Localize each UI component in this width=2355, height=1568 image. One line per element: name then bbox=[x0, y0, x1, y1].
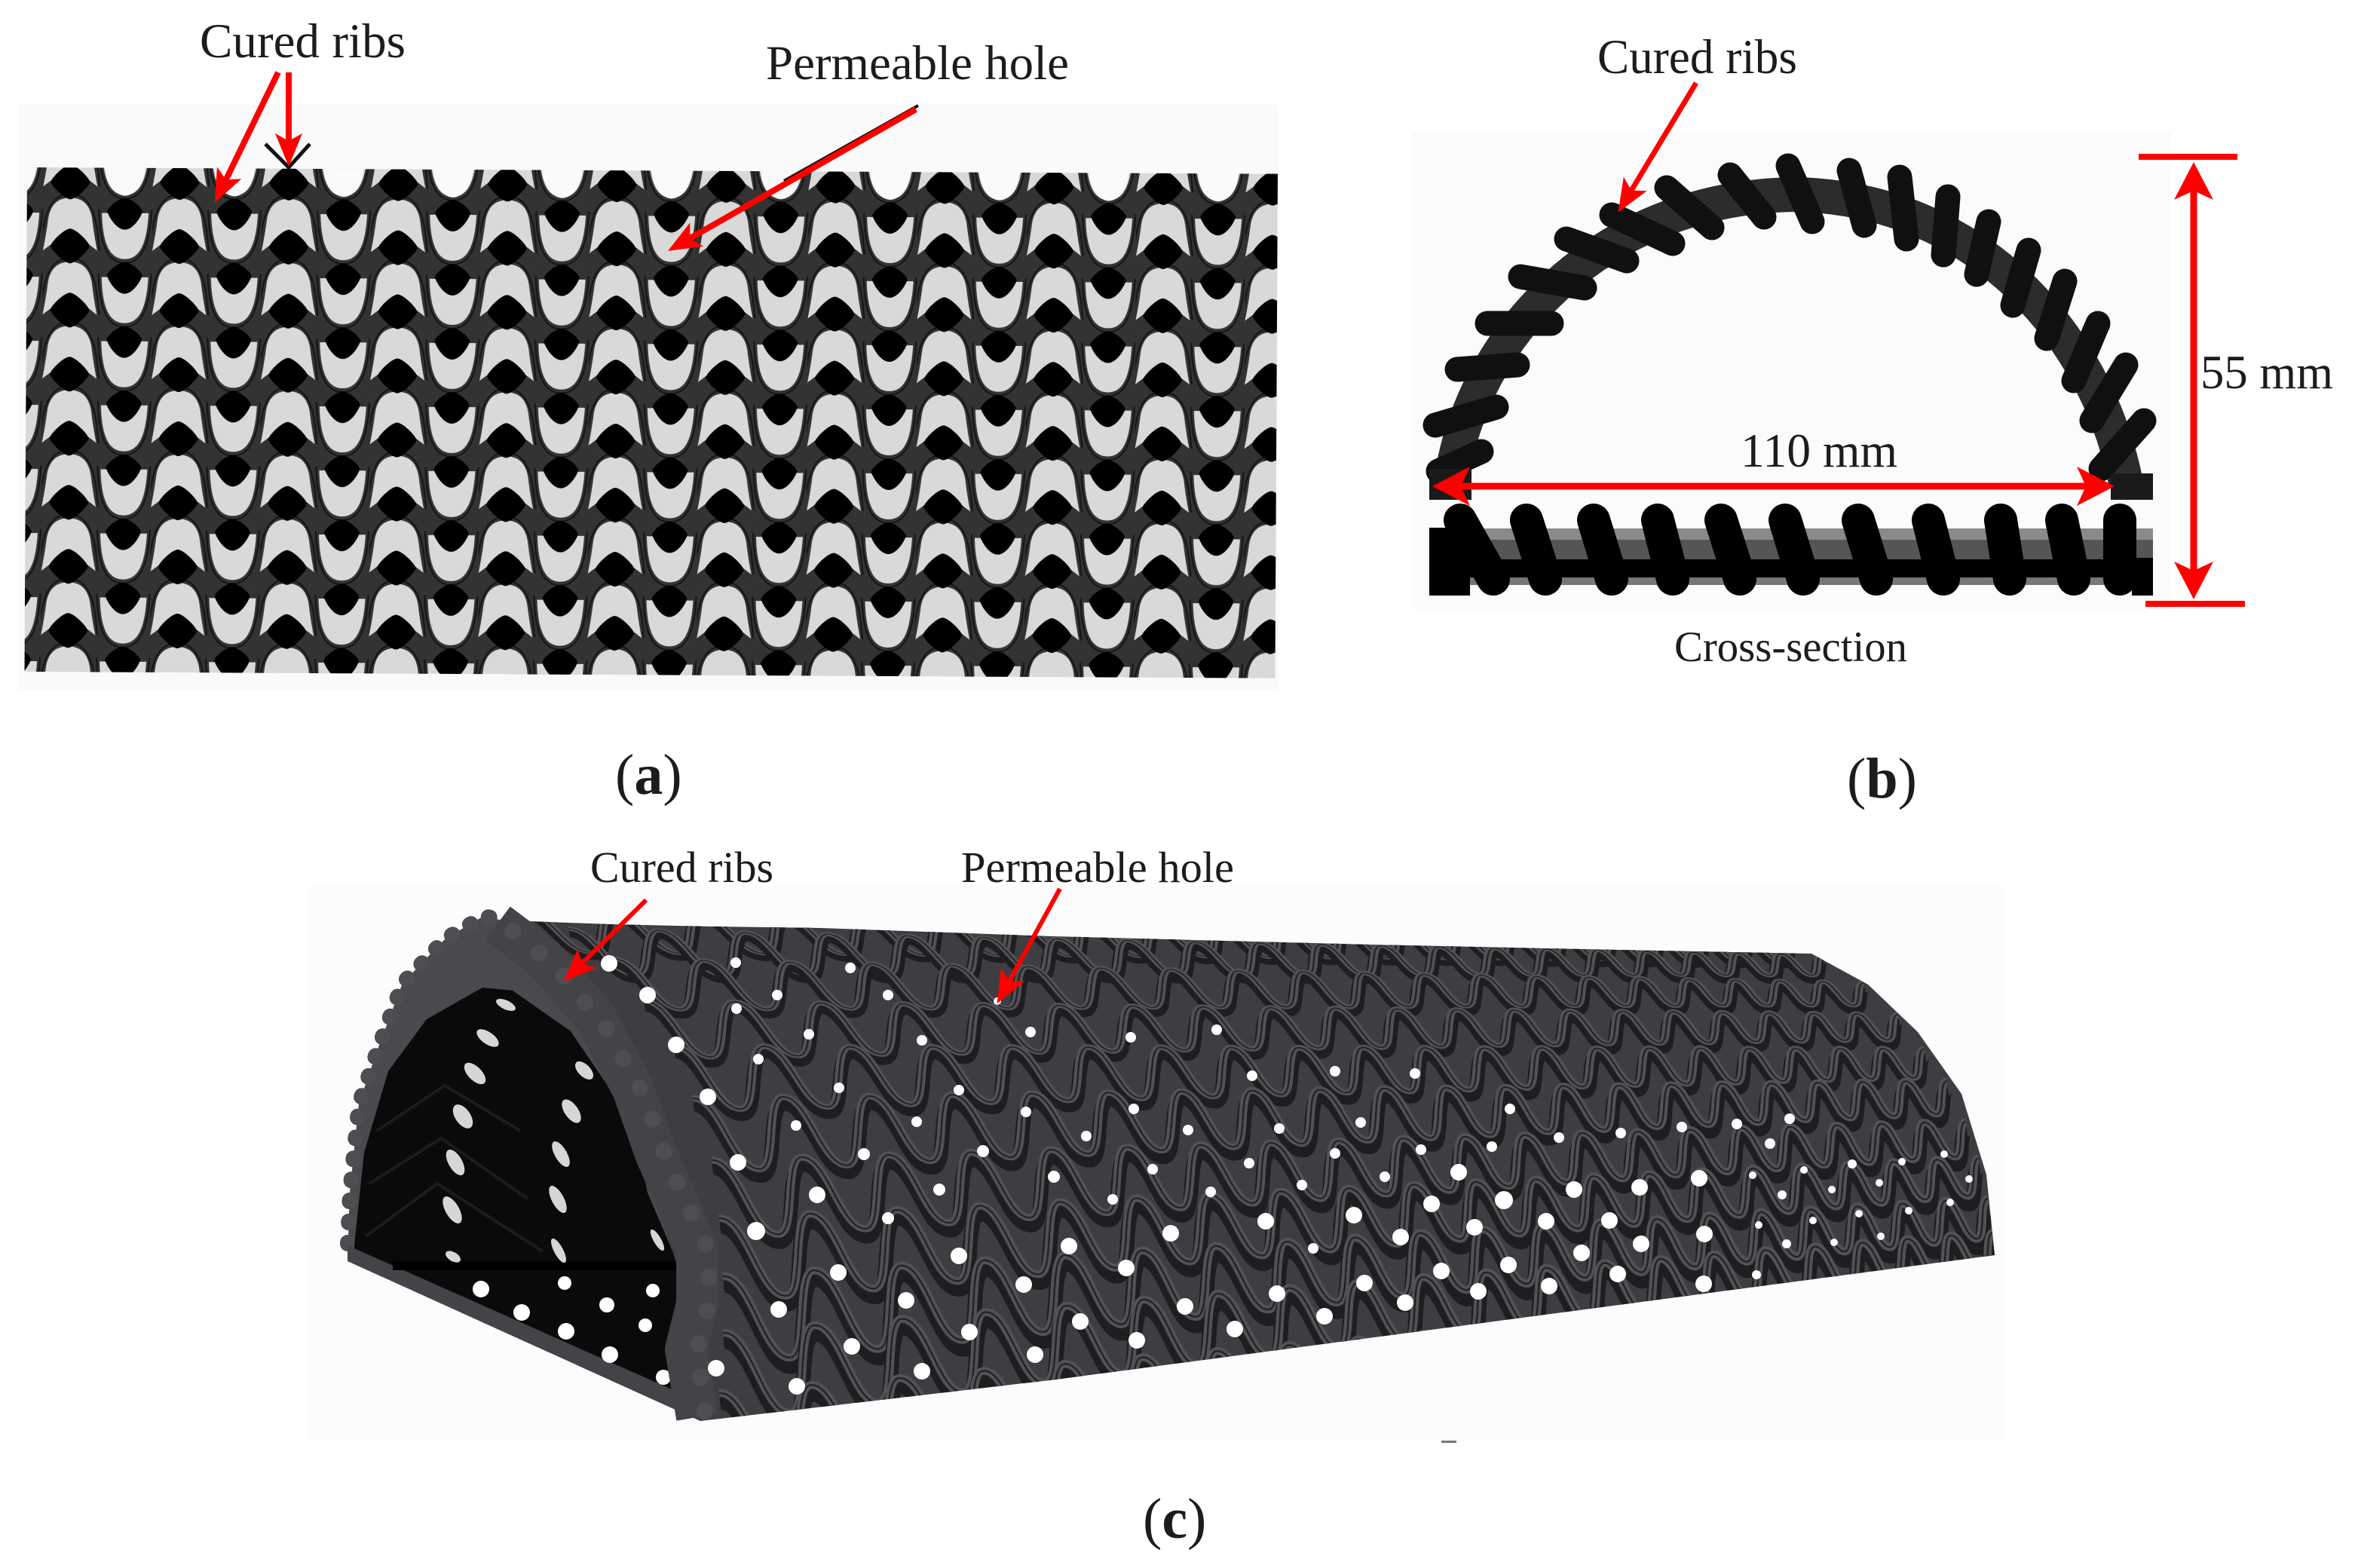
mesh sheet with cured ribs and permeable holes bbox=[24, 167, 1278, 678]
arrow: cured ribs right bbox=[286, 72, 292, 144]
inner chevrons bbox=[366, 1086, 543, 1251]
small grey mark bbox=[1441, 1441, 1456, 1443]
label: cross-section: Cross-section bbox=[1674, 623, 1907, 671]
wavy outer mesh surface bbox=[529, 921, 1995, 1421]
small black chevron mark bbox=[265, 144, 310, 167]
oval holes on the inner wall bbox=[439, 997, 666, 1265]
label: cured ribs: Cured ribs bbox=[1597, 30, 1797, 84]
base ribs bbox=[1460, 520, 2120, 579]
panel a background bbox=[18, 105, 1279, 691]
arrow shadow bbox=[784, 106, 918, 181]
arrow: cured ribs bbox=[580, 900, 646, 966]
arrow: cured ribs left bbox=[225, 72, 278, 182]
floor holes bbox=[473, 1276, 671, 1385]
arch body band bbox=[1451, 194, 2126, 482]
arch ribs bbox=[1435, 166, 2144, 471]
label: cured ribs: Cured ribs bbox=[200, 14, 406, 69]
label: permeable hole: Permeable hole bbox=[766, 36, 1069, 90]
panel a: flat mesh sheet bbox=[18, 14, 1279, 807]
label: permeable hole: Permeable hole bbox=[961, 843, 1234, 892]
scalloped edge bbox=[348, 916, 528, 1244]
arch base blocks bbox=[1429, 469, 2153, 500]
panel b background bbox=[1412, 132, 2171, 610]
panel c: 3D printed half-tube bbox=[308, 843, 2020, 1551]
base strip layers bbox=[1429, 528, 2153, 585]
arrow: permeable hole bbox=[1008, 889, 1060, 984]
label: 55 mm: 55 mm bbox=[2200, 346, 2333, 399]
arrow: cured ribs bbox=[1630, 83, 1696, 193]
dimension tick bottom bbox=[2145, 601, 2245, 607]
dimension tick top bbox=[2139, 154, 2237, 160]
dark inside of the tube bbox=[354, 988, 681, 1395]
outer rim of front opening bbox=[348, 916, 700, 1421]
dimension: height bbox=[2191, 185, 2197, 577]
caption a: (a) bbox=[615, 743, 682, 807]
lumps on the front rim bbox=[513, 931, 709, 1413]
label: 110 mm: 110 mm bbox=[1741, 424, 1897, 477]
black line across floor bbox=[393, 1261, 681, 1270]
arrow: permeable hole bbox=[688, 109, 916, 240]
caption b: (b) bbox=[1847, 747, 1917, 810]
base plate edge bbox=[348, 1245, 700, 1421]
base side blocks bbox=[1429, 528, 2153, 596]
round permeable holes on the surface bbox=[601, 955, 1973, 1395]
panel c background bbox=[308, 886, 2005, 1441]
panel b: cross-section bbox=[1412, 30, 2333, 810]
front rim of the tube bbox=[498, 923, 697, 1417]
label: cured ribs: Cured ribs bbox=[590, 843, 773, 892]
dimension: width bbox=[1455, 482, 2092, 490]
caption c: (c) bbox=[1143, 1487, 1206, 1551]
